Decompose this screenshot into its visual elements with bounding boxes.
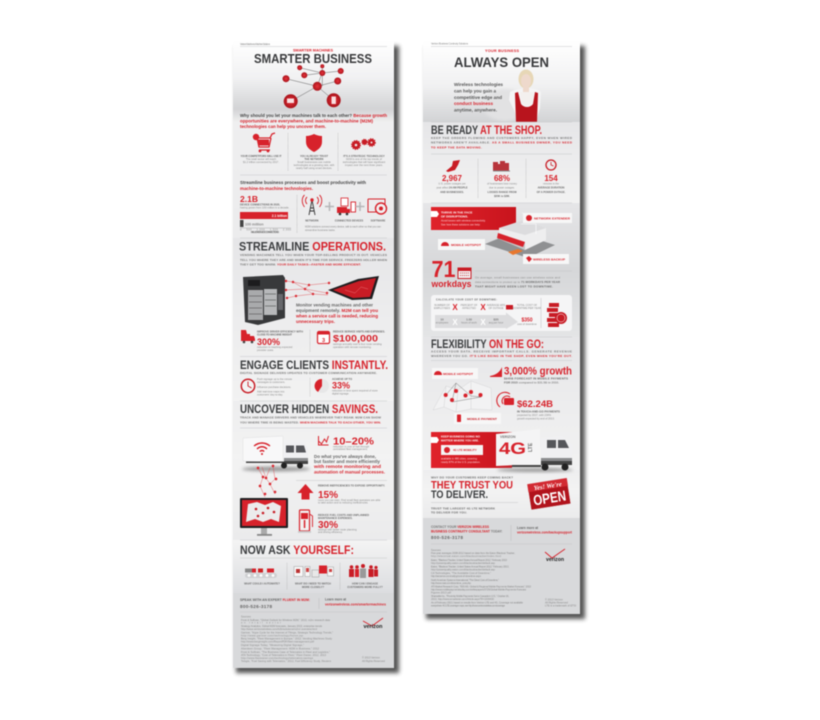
text: signage notes: Influence purchase decisions. (257, 385, 291, 389)
stat: 10-20%: reduction in cost of fuel through (333, 444, 370, 448)
image: monitor with map (240, 498, 288, 536)
panel: cost of downtime calculator: CALCULATE YOUR COST OF DOWNTIME: (436, 298, 497, 302)
benefit captions: nearly half using smart devices. (296, 166, 332, 170)
text: monitor vending machines: when a service call is needed, reducing (295, 314, 378, 318)
benefit captions: THE NETWORK (304, 157, 324, 161)
text: signage notes: Push signage up to the minute (257, 377, 293, 381)
text: do what you've always done: with remote monitoring and (313, 464, 381, 469)
red banner: thrive (431, 207, 516, 230)
text: they trust you to deliver: TO DELIVER. (431, 489, 488, 501)
stat: 10-20%: centralized fleet management. (333, 447, 368, 451)
red banner: thrive: THRIVE IN THE FACE (441, 210, 472, 214)
text: signage notes: messages to customers. (257, 380, 285, 384)
intro text: conduct business (454, 101, 493, 107)
panel: cost of downtime calculator: hours of work (461, 320, 477, 324)
sources: ATI Market Research Corp, "ISIS M1: Global & Regional Mobile Payments Market Forecast," 2013 (431, 584, 532, 588)
heading: engage clients: DIGITAL SIGNAGE DELIVERS UPDATES TO CUSTOMER COMMUNICATION ANYWHERE. (240, 371, 377, 375)
benefit captions: impact over the next three years. (345, 163, 383, 167)
contact block: 800-526-3178 (431, 535, 464, 540)
sources (431, 548, 532, 608)
text: monitor vending machines: unnecessary trips. (296, 319, 335, 324)
sources: http://electrical.eaton.com/blackouttracker/index.html (431, 554, 501, 558)
sources: http://arcserve.com/us/lpg/cost-of-downtime.aspx (431, 574, 482, 578)
panel: always open infographic (423, 41, 585, 619)
icon: connected devices (337, 198, 356, 215)
heading: be ready at the shop: TO KEEP THE DATA MOVING. (431, 146, 482, 150)
subheading: streamline business: machine-to-machine technologies. (240, 186, 313, 191)
contact block: CONTACT YOUR VERIZON WIRELESS (431, 525, 489, 529)
stat: 71 workdays (431, 256, 472, 289)
bar chart: device connections: 2.1B (240, 194, 258, 204)
title: YOUR BUSINESS (485, 49, 519, 53)
benefit captions (240, 133, 386, 171)
network illustration (282, 64, 344, 108)
image: verizon 4G LTE truck: 4G (499, 439, 526, 458)
red banner: thrive: OF DISRUPTIONS. (441, 214, 468, 218)
stat: 154 (537, 160, 566, 194)
copyright (545, 598, 576, 608)
stat: 15% (318, 484, 385, 504)
image: open sign: Yes! We're (533, 481, 562, 492)
sources: http://www.berginsight.com/ReportPDF/fleet-management.pdf (241, 640, 314, 644)
stat: 15%: 15% (318, 490, 338, 501)
panel: cost of downtime calculator: 1.00 (466, 318, 472, 322)
panel: cost of downtime calculator: AFFECTED (462, 306, 476, 310)
title: SMARTER MACHINES (293, 48, 333, 52)
sources: Eaton, "Blackout Tracker, United States Annual Report 2012," February 2013, (431, 564, 509, 568)
heading: be ready at the shop: KEEP THE ORDERS FLOWING AND CUSTOMERS HAPPY, EVEN WHEN WIRED (431, 136, 573, 140)
stat: 3,000% growth: $945B FORECAST IN MOBILE PAYMENTS (504, 376, 568, 380)
sources: Frost & Sullivan, "Global Outlook for Wireless M2M," 2013, m2m research data (241, 618, 331, 622)
benefit captions: technologies that will have significant (343, 160, 386, 164)
subheading: streamline business: Streamline business processes and boost productivity with (240, 180, 366, 185)
stat: 15%: to take action and to reducing inefficiencies. (318, 500, 369, 504)
stat: 154: 154 (544, 174, 558, 183)
copyright: © 2013 Verizon (545, 598, 563, 602)
image: verizon 4G LTE truck: VERIZON (500, 435, 516, 439)
stat: 2,967: U.S. power outages per (438, 182, 466, 186)
benefit captions: YOU ALREADY TRUST (300, 154, 328, 158)
icon: plus (325, 202, 334, 211)
text: monitor vending machines (295, 302, 378, 324)
sources: Shareable Inc., "Proximity Mobile Payments Set to Cascade in U.S.," October 16, (431, 594, 509, 598)
stat: 15%: more you can earn. Find small fleet operators are able (318, 498, 381, 502)
heading: streamline operations: VENDING MACHINES TELL YOU WHEN YOUR TOP-SELLING PRODUCT IS OUT. VEHICLES (240, 253, 387, 257)
sources: http://www.mobilepaymentstoday.com/whitepapers/3725/Global-Mobile-Payments-Forecast (431, 588, 526, 592)
icon: customers (349, 564, 378, 578)
stat: $62.24B: growth expected by end of 2013. (517, 416, 555, 420)
red banner: keep business going: nearly 87% of the U.S. population. (441, 460, 481, 464)
panel: cost of downtime calculator: $35 (493, 318, 499, 322)
panel: cost of downtime calculator: X (452, 303, 458, 312)
text: do what you've always done (313, 454, 385, 474)
bar chart: device connections: DEVICE CONNECTIONS IN 2020, (240, 202, 280, 206)
labels: network, devices, software: streamline business tasks. (305, 228, 336, 232)
caption: what could I automate: WHAT COULD I AUTOMATE? (244, 582, 280, 586)
stat: 300%: reduction in reaching expected (257, 345, 293, 349)
stat: 33% (332, 377, 378, 396)
stat: $100,000: REDUCE SERVICE VISITS AND EXPENSES. (333, 330, 385, 334)
bar chart: device connections (240, 194, 292, 234)
text: workdays explanation (475, 276, 561, 288)
stat: 300%: IMPROVE DRIVER EFFICIENCY WITH (257, 330, 303, 334)
image: vending machine (243, 275, 285, 325)
heading: uncover hidden savings: YOU WHERE TIME IS BEING WASTED. WHEN MACHINES TALK TO EACH OTHER, YOU WIN. (240, 420, 381, 424)
icon: network tower (302, 195, 322, 215)
heading: streamline operations: TELL YOU WHERE THEY ARE AND WHEN IT'S TIME FOR SERVICE. FREEZERS HOLLER WHEN (240, 258, 388, 262)
labels: network, devices, software: M2M solutions connect every device, talk to each other so that you can (305, 224, 382, 228)
contact block: verizonwireless.com/smartermachines (325, 602, 386, 606)
stat: 300%: provider costs. (257, 348, 274, 352)
verizon logo (363, 618, 383, 630)
panel: cost of downtime calculator: AVERAGE HRS (487, 303, 506, 307)
stat: $62.24B (517, 399, 560, 420)
stat: 68%: 68% (494, 174, 510, 183)
intro text: competitive edge and (454, 95, 502, 101)
sources: http://www.gartner.com/technology/home.jsp (241, 633, 304, 637)
sources: CA Technologies, "The Avoidable Cost of Downtime," (431, 571, 491, 575)
stat: 71 workdays: 71 (432, 256, 456, 282)
callout: wireless backup: WIRELESS BACKUP (533, 258, 565, 262)
callout: network extender (523, 213, 572, 223)
heading: be ready at the shop (431, 125, 573, 150)
bar chart: device connections: MILLION DEVICE CONNECTIONS (251, 230, 279, 234)
text: they trust you to deliver: TRUST THE LARGEST 4G LTE NETWORK (431, 506, 496, 510)
bar chart: device connections: 100 million (245, 222, 264, 226)
panel: cost of downtime calculator: X (452, 318, 458, 327)
verizon logo: verizon (364, 624, 382, 630)
heading: uncover hidden savings: UNCOVER HIDDEN SAVINGS. (240, 404, 378, 416)
header strip: Verizon Machine-to-Machine Solutions (240, 42, 271, 46)
sources: 2013, http://www.emarketer.com/Article.aspx?R=1009430 (431, 597, 495, 601)
sources (241, 614, 333, 663)
stat: $62.24B: IN TOUCH-AND-GO PAYMENTS (517, 410, 560, 414)
contact block: Learn more at (517, 526, 539, 530)
sources: http://www.nasi.com/downtime_cost.php (431, 581, 472, 585)
text: monitor vending machines: equipment remotely. M2M can tell you (296, 308, 378, 313)
sources: Gartner, "Hype Cycle for the Internet of Things, Strategic Technology Trends," (241, 630, 333, 634)
text: they trust you to deliver: THEY TRUST YOU (431, 479, 513, 491)
stat: 33%: 33% (332, 380, 350, 390)
title: SMARTER BUSINESS (254, 52, 372, 66)
labels: network, devices, software: SOFTWARE (371, 218, 386, 222)
sources: Sources: (431, 548, 442, 552)
panel: cost of downtime calculator: cost of downtime (517, 322, 537, 326)
panel: cost of downtime calculator: employees (436, 320, 449, 324)
heading: uncover hidden savings (240, 404, 381, 424)
text: do what you've always done: but faster and more efficiently (314, 459, 381, 464)
stat: 300%: 300% (257, 337, 280, 347)
panel: cost of downtime calculator: avg per hour (489, 320, 503, 324)
panel: cost of downtime calculator: X (480, 318, 486, 327)
icon: devices to watch (294, 566, 334, 577)
red banner: keep business going: 4G LTE MOBILITY (453, 448, 477, 452)
stat: 3,000% growth (490, 366, 572, 384)
sources: http://www.verizonwireless.com/b2b/solutions/m2m/ overview.html (241, 627, 317, 631)
intro text (454, 82, 503, 114)
heading: streamline operations: STREAMLINE OPERATIONS. (239, 242, 386, 254)
stat: 2,967 (436, 160, 468, 194)
red banner: keep business going (431, 432, 512, 468)
stat: 30%: MAINTENANCE EXPENSES. (318, 516, 353, 520)
sources: Five-year averages 2008-2012 based on data from the Eaton Blackout Tracker, (431, 551, 515, 555)
stat: $100,000: operation with remote monitoring. (333, 345, 372, 349)
caption: what do I need to watch (295, 582, 331, 589)
stat: 3,000% growth: FOR 2015 compared to $31.5B in 2010. (504, 380, 559, 384)
icon: automate conveyor (245, 568, 277, 578)
stat: $100,000 (318, 330, 385, 349)
stat: 154: AVERAGE DURATION (538, 185, 565, 189)
stat: 154: minutes is the (543, 182, 560, 186)
callout: mobile payment: MOBILE PAYMENT (467, 417, 497, 421)
image: open sign: OPEN (532, 488, 567, 509)
copyright: All Rights Reserved (362, 659, 385, 663)
stat: 71 workdays: workdays (431, 279, 472, 289)
copyright: © 2013 Verizon (362, 656, 380, 660)
copyright (362, 656, 385, 663)
benefit captions: YOUR COMPETITORS WILL USE IT (240, 154, 282, 158)
stat: 2,967: year affect 24.4M PEOPLE (436, 185, 468, 189)
stat: $62.24B: $62.24B (517, 399, 554, 409)
sources: http://www.fleetowner.com/technology/telematics-savings (241, 656, 314, 660)
heading: engage clients: ENGAGE CLIENTS INSTANTLY. (240, 360, 388, 372)
sources: http://powerquality.eaton.com/blackouttracker/default.asp (431, 561, 496, 565)
red banner: keep business going: available in 480 cities, covering (441, 456, 477, 460)
heading: streamline operations (239, 242, 388, 266)
intro text: anytime, anywhere. (454, 108, 497, 114)
text: signage notes: customers' day-to-day. (257, 392, 283, 396)
text: workdays explanation: On average, small businesses can use wireless voice and (475, 276, 560, 280)
icon: shield (306, 134, 322, 152)
sources: As of February 2013, based on results from Verizon LTE and 4G, Coverage not available (431, 600, 524, 604)
image: red network links (285, 280, 330, 299)
verizon logo: verizon (546, 557, 564, 563)
stat: 10-20%: 10–20% (333, 435, 375, 447)
panel: cost of downtime calculator: OF OUTAGE (488, 306, 504, 310)
icon: shopping cart (253, 133, 275, 152)
sources: http://powerquality.eaton.com/blackouttracker/default.asp (431, 568, 496, 572)
heading: flexibility on the go: WHEREVER YOU GO. IT'S LIKE BEING IN THE SHOP, EVEN WHEN YOU'RE OUT. (431, 354, 572, 358)
contact block: 800-526-3178 (240, 604, 272, 609)
panel: cost of downtime calculator: NUMBER OF (434, 303, 450, 307)
heading: flexibility on the go (431, 339, 572, 358)
sources: Eaton, "Blackout Tracker, United States Annual Report 2012," February 2013 (431, 558, 508, 562)
callout: mobile hotspot (432, 368, 478, 379)
intro text: can help you gain a (454, 88, 496, 94)
heading: flexibility on the go: ACCESS YOUR DATA. RECEIVE IMPORTANT CALLS. GENERATE REVENUE (431, 350, 572, 354)
stat: 10-20% (318, 435, 375, 451)
stat: 300% (241, 330, 303, 352)
labels: network, devices, software (305, 218, 386, 232)
stat: 2,967: AND BUSINESSES. (440, 190, 464, 194)
bar chart: device connections: having grown from 100 million in a decade. (240, 206, 290, 210)
sources: North American Systems International, "The Direct Cost of Downtime," (431, 578, 499, 582)
callout: mobile hotspot (438, 239, 485, 250)
sources: ATA Technology, "Cost of Telematics in Fleet," Fleet Owner, 2012, 2013 (241, 653, 327, 657)
stat: $62.24B: projected by 2017, with 234% (517, 413, 552, 417)
red banner: thrive: See how these solutions can help: (441, 222, 481, 226)
text: they trust you to deliver: TO DELIVER FOR YOU. (431, 510, 467, 514)
bar chart: device connections: 2.1 billion (272, 214, 287, 218)
icon: fuel pump (298, 510, 312, 533)
stat: 68%: of businesses lose money (487, 182, 518, 186)
icon: clock (241, 379, 255, 393)
text: workdays explanation: data connections to protect up to 71 WORKDAYS PER YEAR (475, 280, 561, 284)
text: monitor vending machines: Monitor vending machines and other (296, 302, 373, 308)
icon: up arrow (298, 484, 314, 500)
intro question: Why should you let your machines talk to each other? Because growth (240, 113, 387, 119)
intro question (240, 113, 387, 130)
sources: Strategy Analytics, Global M2M forecasts, January 2013, enterprise trends (241, 624, 323, 628)
sources: everywhere. 4G LTE coverage maps, see http://www.verizonwireless.com/coverage (431, 604, 506, 608)
verizon logo (545, 549, 565, 563)
panel: cost of downtime calculator (431, 295, 572, 331)
callout: wireless backup (523, 254, 569, 264)
sources: on retail sector (241, 621, 281, 625)
labels: network, devices, software: NETWORK (305, 218, 319, 222)
image: verizon 4G LTE truck: LTE (528, 442, 534, 452)
benefit captions: M2M is one of the top trends of (346, 157, 382, 161)
text: do what you've always done: Do what you've always done, (314, 454, 376, 459)
sources: Berg Insight, "Fleet Management in Europe," 2012; Vending Machines Study (241, 636, 333, 640)
stat: 3,000% growth: 3,000% growth (504, 366, 572, 378)
panel: cost of downtime calculator: $350 (521, 318, 533, 324)
image: verizon 4G LTE truck (496, 429, 573, 472)
panel: cost of downtime calculator: TOTAL COST OF (517, 303, 538, 307)
image: network links to monitor (257, 465, 277, 497)
sources: Frost & Sullivan, "The Business Case of Telematics in Fleet and Logistics," (241, 650, 330, 654)
copyright: All Rights Reserved (545, 600, 568, 604)
panel: cost of downtime calculator: 10 (440, 318, 444, 322)
stat: 33%: digital signage. (332, 392, 350, 396)
title: ALWAYS OPEN (454, 54, 549, 70)
image: folded map with pins (433, 381, 492, 412)
icon: tap and go (497, 392, 514, 407)
text: workdays explanation: THAT MIGHT HAVE BEEN LOST TO DOWNTIME. (475, 284, 553, 288)
contact block: Learn more at (325, 598, 347, 602)
stat: 30%: REDUCE FUEL COSTS AND UNPLANNED (318, 513, 369, 517)
header strip: Verizon Business Continuity Solutions (431, 42, 469, 46)
sources: Sources: (241, 614, 252, 618)
heading: be ready at the shop: BE READY AT THE SHOP. (431, 125, 542, 137)
sources: Figures-2013.pdf (431, 590, 451, 594)
stat: 68%: $20K to $2M. (494, 194, 510, 198)
stat: 68%: LOSSES RANGE FROM (488, 190, 516, 194)
image: woman at counter (483, 70, 541, 122)
text: signage notes: Add real-time maps into (257, 390, 285, 394)
benefit captions: technologies at a growing rate, with (294, 163, 335, 167)
image: open sign (527, 478, 571, 510)
intro question: technologies can help you uncover them. (240, 124, 326, 130)
contact block: SPEAK WITH AN EXPERT FLUENT IN M2M: (240, 597, 310, 602)
panel: cost of downtime calculator: DOWNTIME PER YEAR (513, 306, 541, 310)
caption: how can I engage: CUSTOMERS MORE FULLY? (347, 585, 383, 589)
labels: network, devices, software: CONNECTED DEVICES (335, 218, 364, 222)
stat: 30% (318, 513, 369, 534)
stat: 33%: ACHIEVE UP TO (332, 377, 352, 381)
caption: what do I need to watch: WHAT DO I NEED TO WATCH (295, 582, 331, 586)
caption: how can I engage (347, 582, 383, 589)
panel: cost of downtime calculator: EMPLOYEES (434, 306, 450, 310)
text: signage notes (257, 377, 293, 396)
stat: 33%: reduction in time spent required of store (332, 388, 378, 392)
stat: 300%: CLOSE-TO-MACHINE INSIGHT (257, 332, 292, 336)
heading: be ready at the shop: NETWORKS AREN'T AVAILABLE. AS A SMALL BUSINESS OWNER, YOU NEED (431, 141, 573, 145)
callout: network extender: NETWORK EXTENDER (534, 216, 571, 220)
callout: mobile hotspot: MOBILE HOTSPOT (443, 372, 473, 376)
stat: 68% (487, 161, 518, 198)
intro question: opportunities are everywhere, and machine-to-machine (M2M) (240, 119, 373, 125)
red banner: thrive: Avoid losses with wireless connectivity. (441, 218, 486, 222)
heading: now ask yourself: NOW ASK YOURSELF: (240, 545, 354, 557)
stat: 68%: due to power outages. (489, 185, 515, 189)
image: isometric shop (485, 213, 555, 258)
benefit captions: Small businesses use mobile (297, 160, 331, 164)
icon: gears (352, 139, 375, 149)
intro text: Wireless technologies (454, 82, 503, 88)
callout: mobile hotspot: MOBILE HOTSPOT (451, 243, 481, 247)
image: delivery truck (242, 436, 310, 472)
text: they trust you to deliver: WHY DO YOUR CUSTOMERS KEEP COMING BACK? (431, 476, 513, 480)
panel: cost of downtime calculator: X (480, 303, 486, 312)
red banner: keep business going: KEEP BUSINESS GOING NO (441, 434, 481, 438)
contact block: BUSINESS CONTINUITY CONSULTANT TODAY: (431, 529, 503, 533)
subheading: streamline business (240, 180, 366, 191)
stat: $100,000: savings annually over a four route vending (333, 342, 382, 346)
contact block (240, 597, 386, 609)
copyright: LTE is a trademark of ETSI (545, 604, 576, 608)
stat: 154: OF A POWER OUTAGE. (537, 190, 566, 194)
text: they trust you to deliver (431, 476, 518, 514)
benefit captions: IT'S A STRATEGIC TECHNOLOGY (343, 154, 385, 158)
panel: cost of downtime calculator: PERCENT OF (461, 303, 478, 307)
contact block: verizonwireless.com/backupsupport (517, 530, 573, 534)
benefit captions: $1.2 trillion connected by 2017. (243, 160, 279, 164)
red banner: keep business going: MATTER WHERE YOU ARE. (441, 438, 479, 442)
stat: 30%: and driving efficiency. (318, 530, 343, 534)
stat: 15%: REMOVE INEFFICIENCIES TO EXPOSE OPPORTUNITY. (318, 484, 385, 488)
stat: $100,000: 3 (322, 338, 325, 344)
stat: $100,000: $100,000 (333, 334, 378, 344)
heading: uncover hidden savings: TRACK AND MANAGE DRIVERS AND VEHICLES WHEREVER THEY ROAM. M2M CAN SHOW (240, 416, 381, 420)
heading: streamline operations: THEY GET TOO WARM. YOUR DAILY TASKS—FASTER AND MORE EFFICIENT. (240, 262, 361, 266)
stat: 2,967: 2,967 (442, 174, 463, 183)
stat: 30%: savings with better route planning (318, 528, 357, 532)
benefit captions: The retail sector will reach (246, 157, 277, 161)
icon: software (368, 199, 386, 214)
sources: Telogis, "Fuel Saving with Telematics," 2012, Fuel Efficiency Study, Reuters (241, 659, 332, 663)
caption: what do I need to watch: MORE CLOSELY? (302, 585, 324, 589)
sources: Aberdeen Group, "Fleet Management: M2M in Business," 2012 (241, 647, 320, 651)
stat: 30%: 30% (318, 520, 338, 531)
icon: plus (356, 202, 364, 211)
icon: pie chart 33% (315, 379, 329, 393)
bar chart: device connections: 0 500 1,000 1,500 2,000 (240, 228, 292, 232)
image: tablet (328, 276, 379, 300)
sources: Digital Signage Today, "Measuring Digital Signage," (241, 643, 304, 647)
heading: flexibility on the go: FLEXIBILITY ON THE GO: (431, 339, 544, 351)
panel: smarter business infographic (233, 41, 399, 673)
contact block (431, 525, 573, 541)
text: do what you've always done: automation of manual processes. (314, 470, 385, 474)
callout: mobile payment (454, 413, 501, 424)
caption: how can I engage: HOW CAN I ENGAGE (352, 582, 378, 586)
